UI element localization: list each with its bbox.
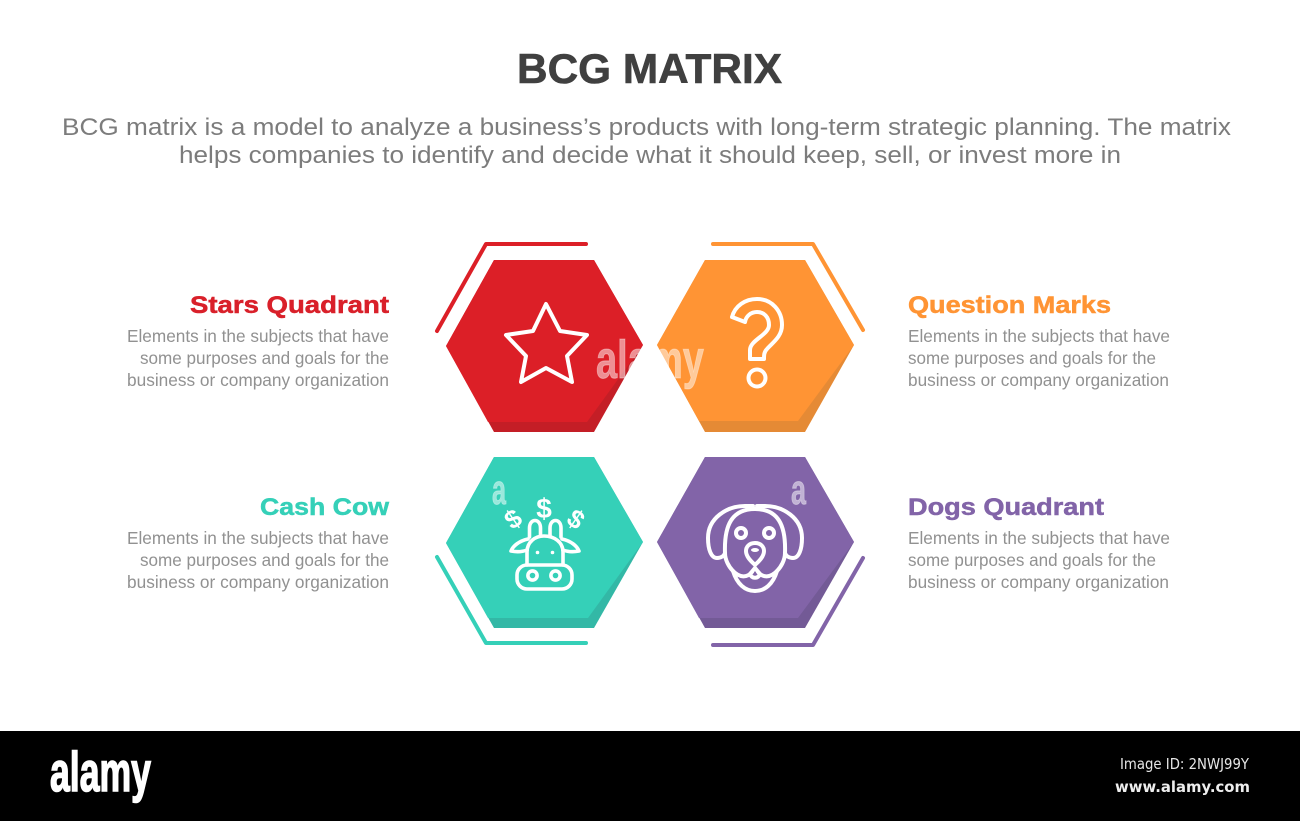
title: BCG MATRIX	[517, 45, 782, 92]
heading: cash cow: Cash Cow	[260, 494, 389, 521]
footer image id: Image ID: 2NWJ99Y	[1120, 755, 1250, 773]
watermark: alamy	[596, 330, 704, 390]
icon: dog	[708, 506, 802, 591]
watermark: a	[791, 466, 806, 513]
description: question marks	[908, 326, 1170, 390]
description: cash cow: some purposes and goals for the	[140, 550, 389, 570]
description: dogs quadrant: business or company organization	[908, 572, 1169, 592]
description: cash cow: Elements in the subjects that have	[127, 528, 389, 548]
panel: stars quadrant text	[127, 292, 389, 390]
panel: question marks text	[908, 292, 1170, 390]
watermark	[492, 330, 806, 513]
description: stars quadrant	[127, 326, 389, 390]
description: stars quadrant: business or company organization	[127, 370, 389, 390]
description: stars quadrant: some purposes and goals for the	[140, 348, 389, 368]
description: cash cow: business or company organization	[127, 572, 389, 592]
footer bar	[0, 731, 1300, 821]
heading: question marks: Question Marks	[908, 292, 1111, 319]
footer logo: alamy	[50, 740, 151, 803]
heading: dogs quadrant: Dogs Quadrant	[908, 494, 1104, 521]
footer url: www.alamy.com	[1115, 778, 1250, 796]
hexagon: cash cow	[437, 457, 643, 643]
description: question marks: business or company organization	[908, 370, 1169, 390]
subtitle text	[62, 114, 1231, 169]
description: stars quadrant: Elements in the subjects that have	[127, 326, 389, 346]
description: dogs quadrant: some purposes and goals for the	[908, 550, 1156, 570]
hexagon: question marks	[657, 244, 863, 432]
description: question marks: Elements in the subjects that have	[908, 326, 1170, 346]
hexagon: stars	[437, 244, 643, 432]
watermark: a	[492, 466, 506, 513]
icon: cow with dollar signs: $	[561, 503, 591, 536]
subtitle text: helps companies to identify and decide what it should keep, sell, or invest more in	[179, 142, 1121, 169]
description: dogs quadrant	[908, 528, 1170, 592]
hexagon: dogs	[657, 457, 863, 645]
subtitle text: BCG matrix is a model to analyze a business’s products with long-term strategic planning. The matrix	[62, 114, 1231, 141]
icon: star	[506, 304, 587, 382]
icon: cow with dollar signs: $	[498, 502, 528, 535]
description: cash cow	[127, 528, 389, 592]
icon: cow with dollar signs	[498, 493, 591, 589]
icon: cow with dollar signs: $	[536, 493, 552, 524]
description: question marks: some purposes and goals for the	[908, 348, 1156, 368]
description: dogs quadrant: Elements in the subjects that have	[908, 528, 1170, 548]
heading: stars quadrant: Stars Quadrant	[190, 292, 389, 319]
icon: question mark	[732, 299, 782, 386]
panel: dogs quadrant text	[908, 494, 1170, 592]
panel: cash cow text	[127, 494, 389, 592]
